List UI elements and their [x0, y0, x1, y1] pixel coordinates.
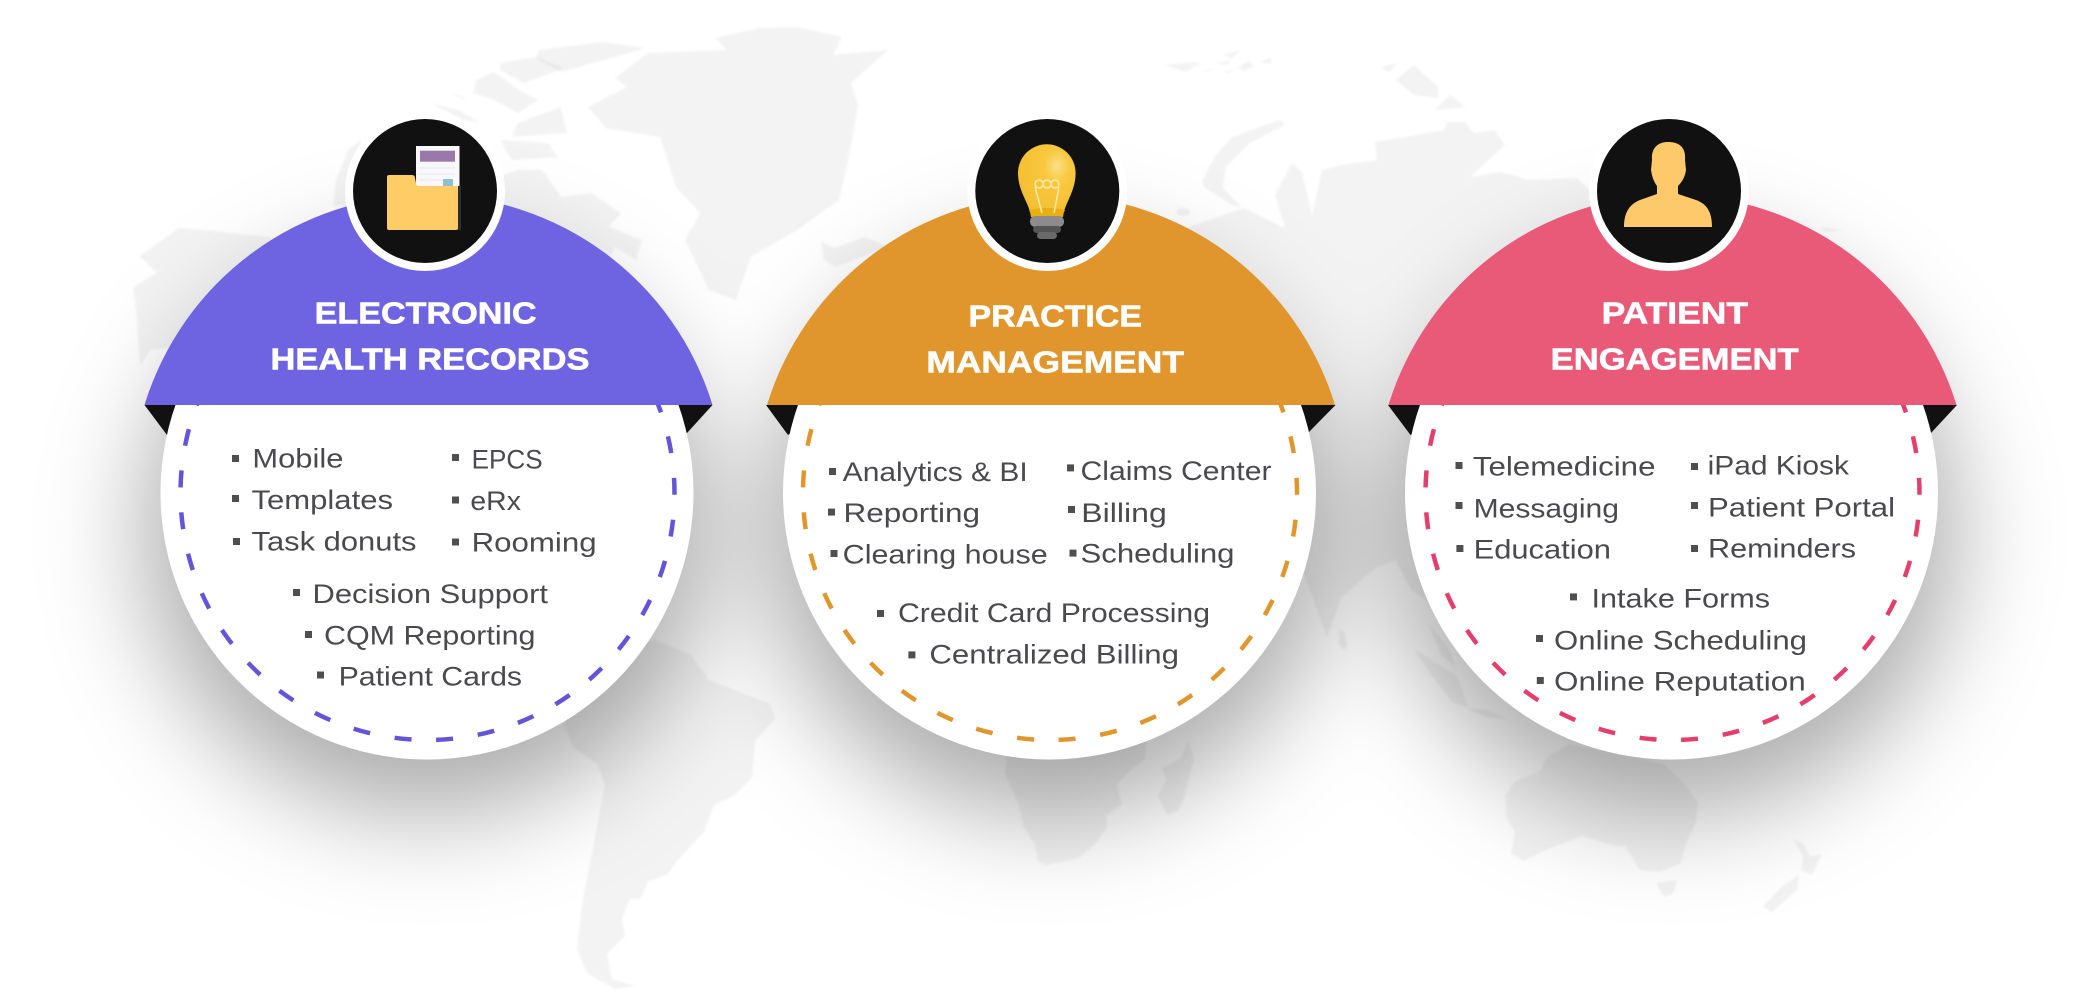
list: practice management features: Centralized Billing: [929, 640, 1179, 670]
icon: folder with document: [345, 111, 505, 271]
list: patient engagement features: Patient Portal: [1708, 493, 1895, 523]
list: patient engagement features: Education: [1474, 535, 1611, 565]
list: practice management features: Reporting: [844, 498, 980, 528]
heading: patient engagement: ENGAGEMENT: [1551, 341, 1799, 376]
list: patient engagement features: Telemedicine: [1473, 452, 1656, 482]
list: practice management features: Billing: [1081, 498, 1167, 528]
heading: electronic health records: [270, 295, 590, 376]
heading: patient engagement: [1551, 295, 1799, 376]
list: electronic health records features: CQM Reporting: [324, 620, 536, 650]
list: patient engagement features: Online Scheduling: [1554, 626, 1807, 656]
heading: patient engagement: PATIENT: [1602, 295, 1748, 330]
list: practice management features: Analytics & BI: [843, 457, 1028, 487]
list: electronic health records features: Task donuts: [252, 526, 416, 556]
list: electronic health records features: Templates: [252, 485, 393, 515]
icon: person silhouette: [1589, 111, 1749, 271]
heading: practice management: MANAGEMENT: [926, 344, 1184, 379]
panel: practice management: [766, 111, 1336, 760]
list: patient engagement features: iPad Kiosk: [1708, 451, 1850, 481]
list: electronic health records features: Rooming: [472, 527, 597, 557]
list: practice management features: Credit Card Processing: [898, 598, 1210, 628]
list: practice management features: Clearing house: [843, 540, 1048, 570]
soft drop shadows: [145, 250, 1954, 814]
list: electronic health records features: Patient Cards: [339, 661, 522, 691]
list: electronic health records features: Decision Support: [312, 579, 549, 609]
list: electronic health records features: eRx: [470, 486, 521, 516]
heading: electronic health records: HEALTH RECORDS: [270, 341, 590, 376]
heading: electronic health records: ELECTRONIC: [315, 295, 537, 330]
heading: practice management: PRACTICE: [968, 298, 1142, 333]
list: patient engagement features: [1456, 451, 1895, 697]
heading: practice management: [926, 298, 1184, 379]
list: patient engagement features: Online Reputation: [1554, 667, 1806, 697]
panel: electronic health records: [144, 111, 712, 760]
list: practice management features: Scheduling: [1080, 539, 1234, 569]
panel: patient engagement: [1388, 111, 1957, 760]
list: patient engagement features: Reminders: [1708, 534, 1856, 564]
world map background: [133, 27, 1844, 989]
icon: light bulb: [967, 111, 1127, 271]
list: electronic health records features: Mobile: [252, 444, 343, 474]
list: practice management features: [828, 456, 1272, 670]
list: practice management features: Claims Center: [1080, 456, 1272, 486]
list: patient engagement features: Intake Forms: [1592, 584, 1770, 614]
list: electronic health records features: [232, 444, 597, 691]
list: electronic health records features: EPCS: [472, 444, 543, 474]
list: patient engagement features: Messaging: [1474, 494, 1619, 524]
